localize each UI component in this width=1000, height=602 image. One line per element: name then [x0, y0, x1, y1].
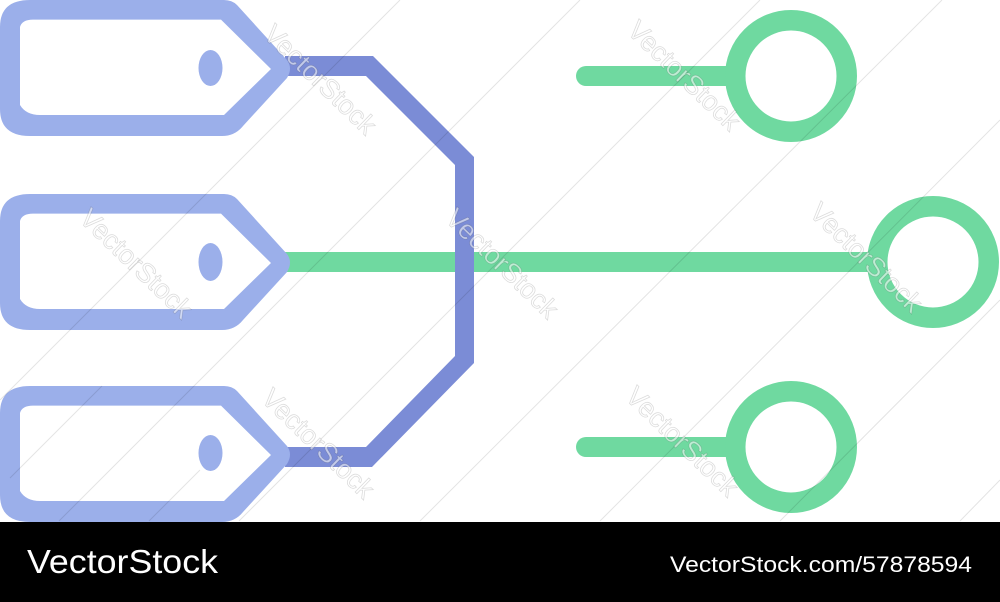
tag hole: middle [198, 243, 222, 281]
watermarks: VectorStock [74, 203, 199, 325]
tag hole: top [198, 50, 222, 86]
pin: bottom right [586, 391, 847, 503]
watermarks: VectorStock [256, 383, 381, 505]
center green line [285, 252, 875, 272]
pin: center right [877, 206, 989, 318]
footer brand: VectorStock [27, 543, 219, 580]
tag: bottom [0, 386, 290, 522]
watermarks: VectorStock [258, 19, 383, 141]
bracket connector [285, 56, 474, 467]
footer bar [0, 522, 1000, 602]
tag: middle [0, 194, 290, 330]
footer url: VectorStock.com/57878594 [670, 552, 972, 577]
watermarks [74, 15, 929, 505]
watermarks: VectorStock [620, 381, 745, 503]
watermarks: VectorStock [622, 15, 747, 137]
watermarks: VectorStock [440, 203, 565, 325]
tag hole: bottom [198, 435, 222, 471]
pin: top right [586, 20, 847, 132]
tag: top [0, 0, 290, 136]
watermarks: VectorStock [804, 197, 929, 319]
